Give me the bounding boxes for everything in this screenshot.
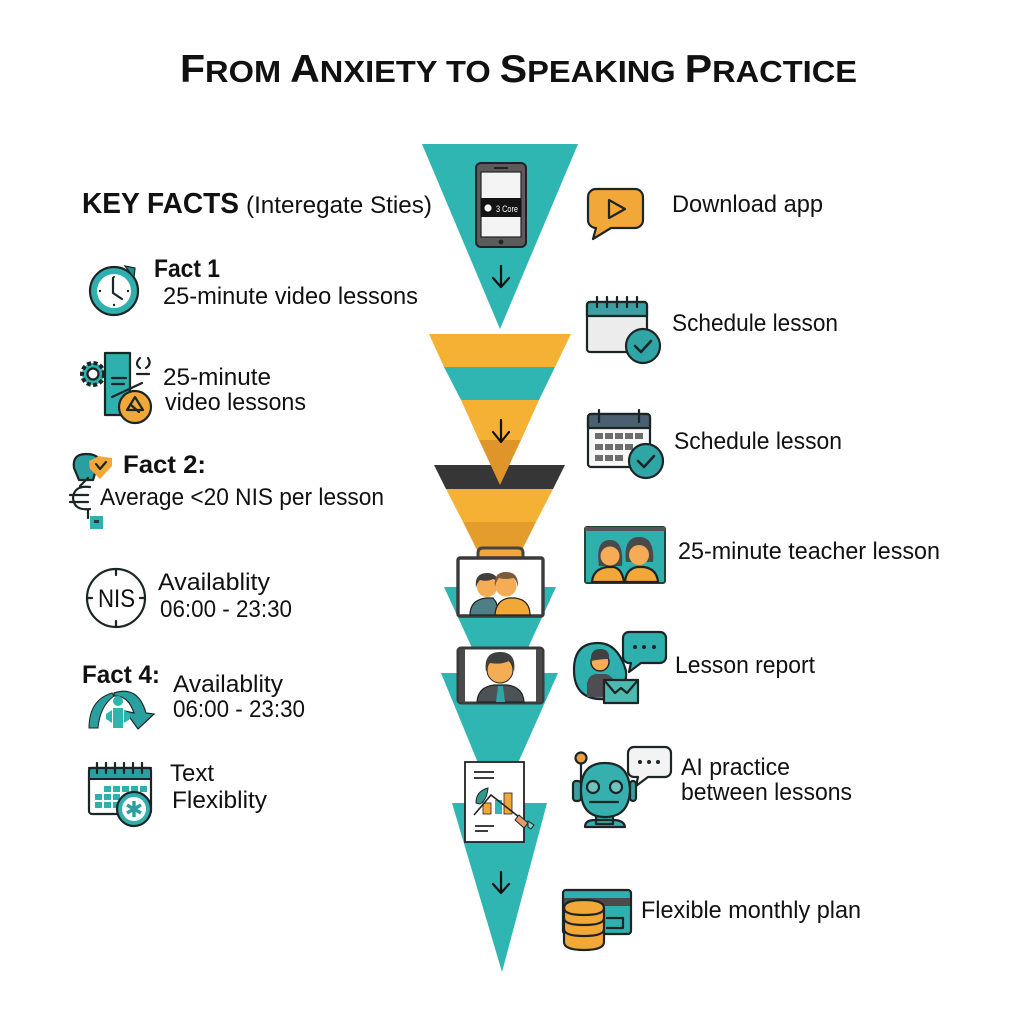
icon: calendar with asterisk badge <box>89 763 151 826</box>
title: FROM ANXIETY TO SPEAKING PRACTICE <box>180 48 857 91</box>
icon: calendar with check <box>587 297 660 363</box>
fact text: availability <box>158 569 292 623</box>
step: teacher lesson: 25-minute teacher lesson <box>678 538 940 565</box>
fact 4 text <box>173 671 305 723</box>
icon: clock <box>90 266 138 315</box>
icon: robot with speech bubble <box>573 747 671 827</box>
icon: grid calendar with check <box>588 410 663 478</box>
fact text: availability: Availablity <box>158 569 270 596</box>
step: flexible monthly plan: Flexible monthly plan <box>641 897 861 924</box>
key facts heading: (Interegate Sties) <box>246 192 432 219</box>
fact text: flexibility <box>170 760 267 814</box>
fact 2 text: Average <20 NIS per lesson <box>100 484 384 511</box>
icon: coins and card <box>563 890 631 950</box>
step: AI practice: AI practice <box>681 754 790 781</box>
icon: phone: 3 Core <box>496 204 518 214</box>
key facts heading: KEY FACTS <box>82 188 239 220</box>
fact text: 25-minute video lessons <box>163 364 306 416</box>
funnel 2: amber and teal <box>429 334 571 485</box>
fact text: 25-minute video lessons: video lessons <box>165 389 306 416</box>
step: AI practice: between lessons <box>681 779 852 806</box>
arrow: funnel 2 <box>493 420 509 442</box>
fact 4 text: Availablity <box>173 671 283 698</box>
fact 4 label: Fact 4: <box>82 661 160 689</box>
arrow: funnel 1 <box>493 266 509 287</box>
step: AI practice <box>681 754 852 806</box>
funnel 4: teal <box>444 587 556 650</box>
fact 2 label: Fact 2: <box>123 451 206 479</box>
fact text: 25-minute video lessons: 25-minute <box>163 364 271 391</box>
fact 1 text <box>154 255 418 310</box>
funnel 5: teal <box>441 673 558 763</box>
fact text: availability: 06:00 - 23:30 <box>160 596 292 623</box>
icon: report document <box>465 762 534 842</box>
panel: process steps <box>563 189 940 950</box>
step: schedule lesson: Schedule lesson <box>672 310 838 337</box>
arrow: funnel 6 <box>493 872 509 893</box>
icon: person with circular arrow <box>89 691 154 729</box>
funnel 6: teal <box>452 803 547 972</box>
panel: key facts <box>70 188 432 826</box>
funnel 1: download <box>422 144 578 329</box>
fact 4 text: 06:00 - 23:30 <box>173 696 305 723</box>
step: lesson report: Lesson report <box>675 652 815 679</box>
icon: play symbol <box>609 200 625 218</box>
icon: NIS circle <box>87 569 145 627</box>
icon: video speech bubble <box>588 189 643 239</box>
icon: tablet with two students <box>458 548 543 616</box>
icon: NIS circle: NIS <box>98 585 135 613</box>
icon: report bubble, person and envelope <box>574 632 666 703</box>
fact text: flexibility: Text <box>170 760 214 787</box>
fact text: flexibility: Flexiblity <box>172 787 267 814</box>
icon: video call with two people <box>585 527 665 583</box>
icon: head and heart check <box>74 454 112 480</box>
funnel 3: dark and amber <box>434 465 565 556</box>
fact 1 text: 25-minute video lessons <box>163 283 418 310</box>
icon: tablet with teacher <box>458 648 543 703</box>
step: download app: Download app <box>672 191 823 218</box>
step: schedule lesson again: Schedule lesson <box>674 428 842 455</box>
icon: gear, document and coin <box>82 353 151 423</box>
fact 1 text: Fact 1 <box>154 255 220 283</box>
icon: phone <box>476 163 526 247</box>
icon: euro <box>70 478 103 529</box>
key facts heading <box>82 188 432 220</box>
funnel: stacked central funnels <box>422 144 578 972</box>
